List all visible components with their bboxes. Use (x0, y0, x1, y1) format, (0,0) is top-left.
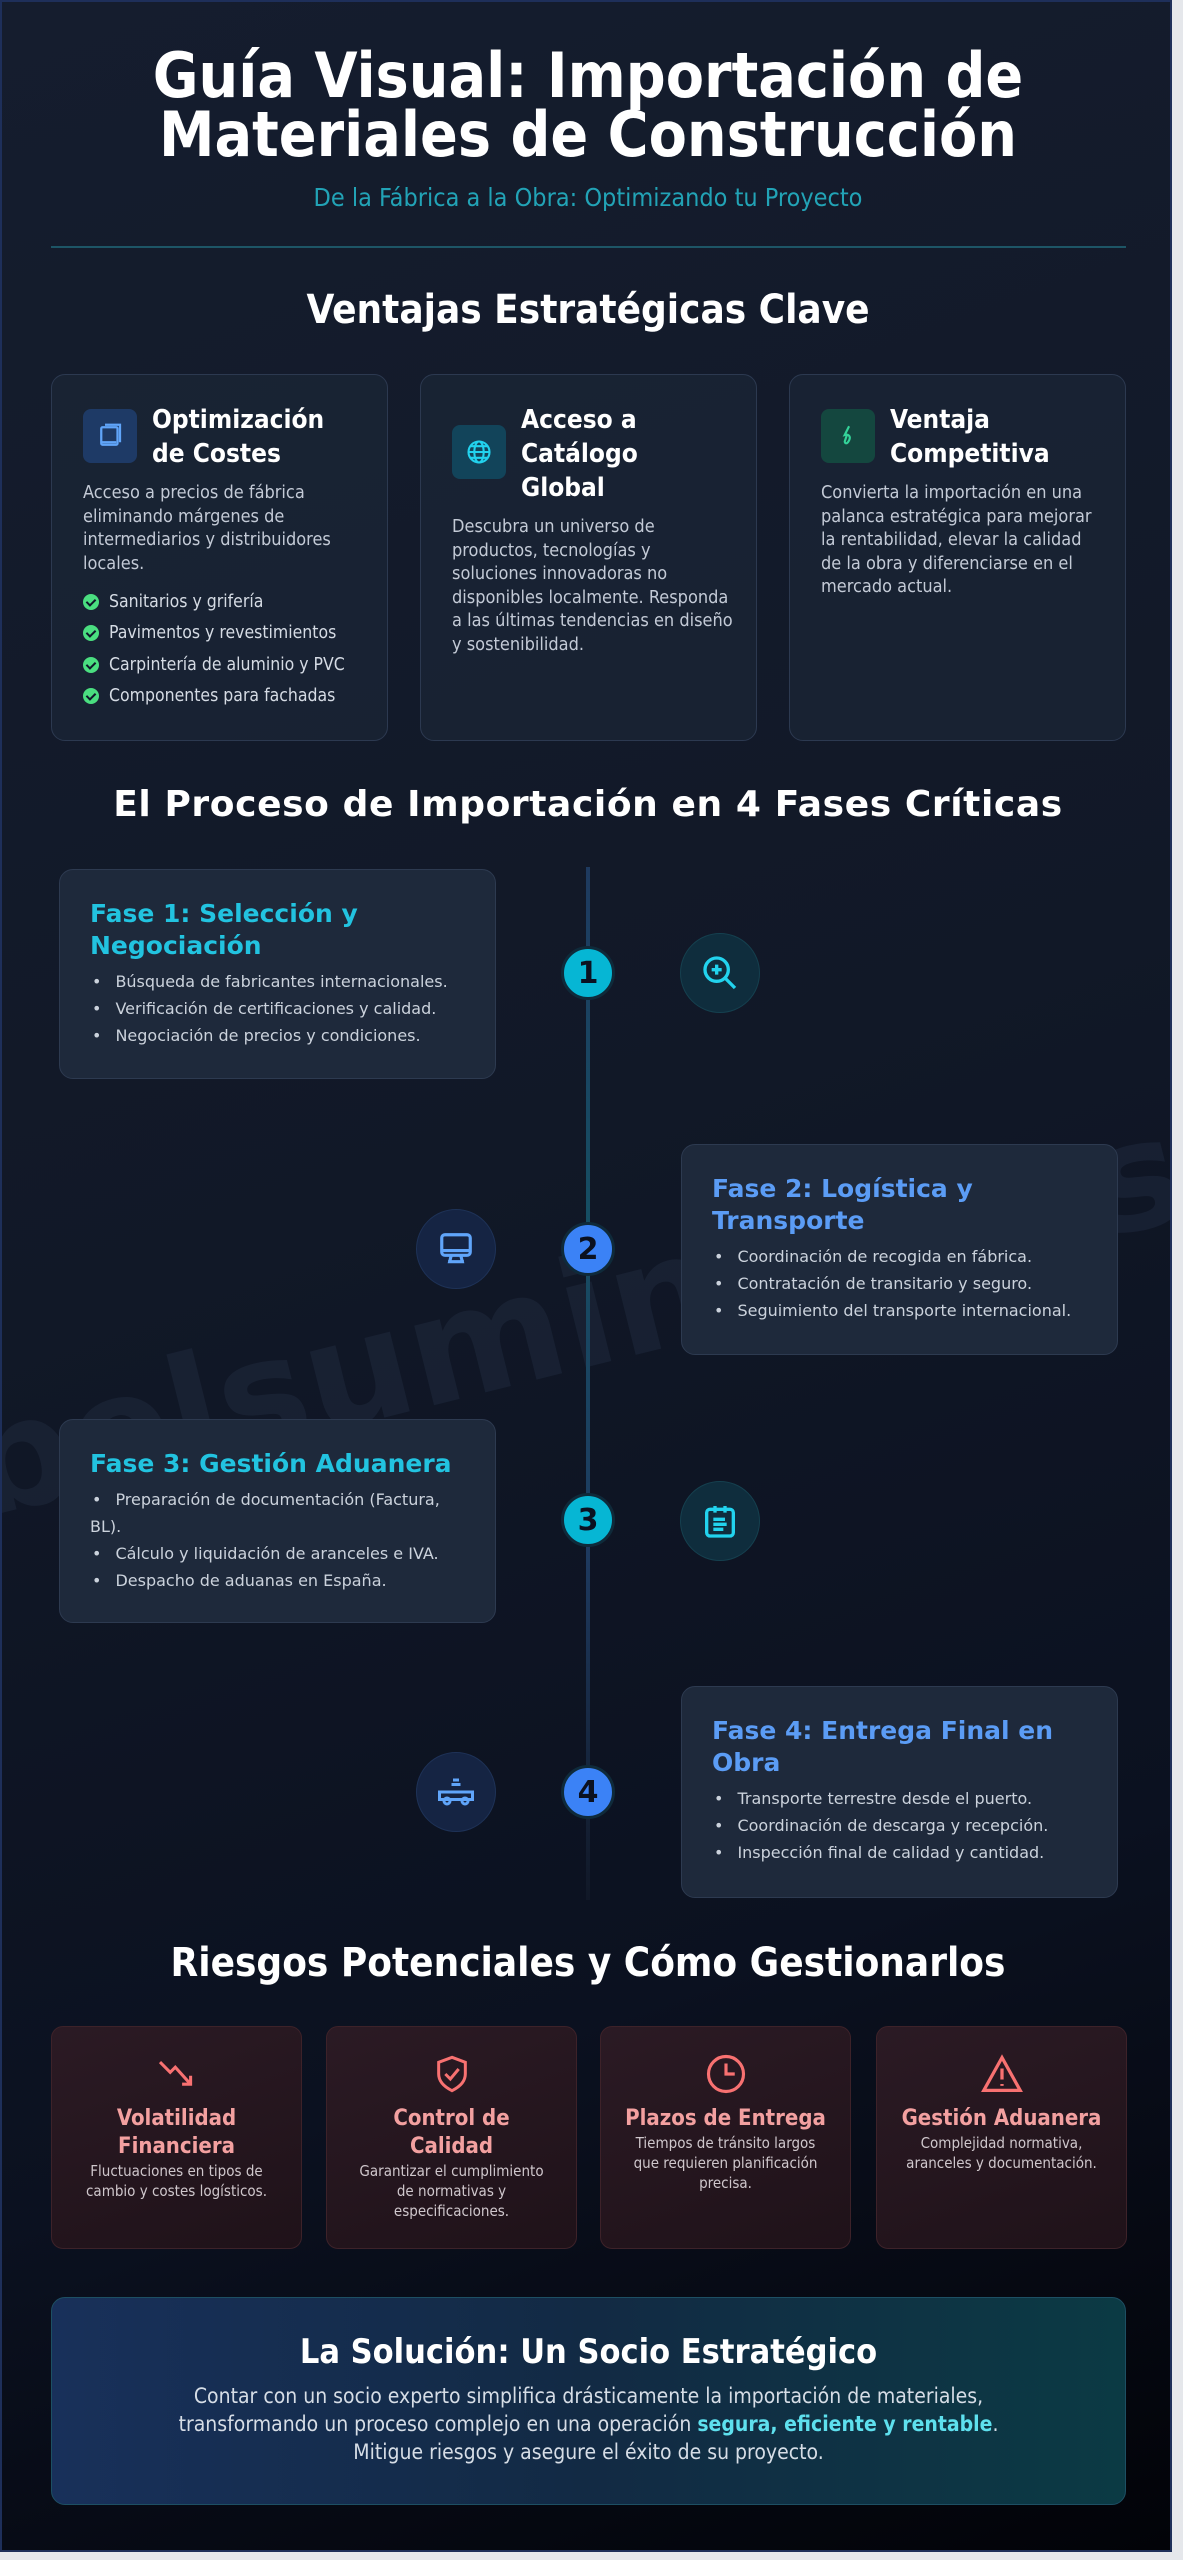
risk: aduanera: Gestión Aduanera (902, 2106, 1101, 2131)
risk: calidad: Control de (393, 2106, 510, 2131)
title: Materiales de Construcción (159, 98, 1017, 171)
solution title: La Solución: Un Socio Estratégico (300, 2332, 877, 2372)
phase 1: Negociación (90, 931, 262, 960)
icon: competitive (821, 409, 875, 463)
icon: clipboard (680, 1481, 760, 1561)
risk: volatilidad (51, 2026, 302, 2249)
phase 4: Transporte terrestre desde el puerto. (737, 1789, 1032, 1808)
phase 3: Preparación de documentación (Factura, BL). (90, 1490, 440, 1536)
card: ventaja competitiva: Competitiva (890, 439, 1050, 469)
phase 3 (59, 1419, 496, 1623)
phase 4: Obra (712, 1748, 780, 1777)
phase 1: Negociación de precios y condiciones. (115, 1026, 421, 1045)
card: optimización de costes: Acceso a precios de fábrica eliminando márgenes de intermediarios y distribuidores locales. (83, 482, 331, 574)
title: Guía Visual: Importación de (153, 39, 1023, 112)
phase 2: Coordinación de recogida en fábrica. (737, 1247, 1032, 1266)
card: ventaja competitiva: Convierta la importación en una palanca estratégica para mejorar la rentabilidad, elevar la calidad de la obra y diferenciarse en el mercado actual. (821, 482, 1092, 597)
heading: ventajas: Ventajas Estratégicas Clave (306, 287, 870, 333)
step 1: 1 (578, 956, 598, 990)
risk: volatilidad: Volatilidad (117, 2106, 236, 2131)
solution text (179, 2384, 998, 2464)
phase 1: Fase 1: Selección y (90, 899, 358, 928)
title (153, 39, 1023, 171)
card: optimización de costes (51, 374, 388, 741)
phase 3: Despacho de aduanas en España. (115, 1571, 387, 1590)
phase 3: Cálculo y liquidación de aranceles e IVA. (115, 1544, 439, 1563)
phase 1: Verificación de certificaciones y calidad. (115, 999, 436, 1018)
risk: aduanera: Complejidad normativa, aranceles y documentación. (906, 2134, 1097, 2172)
card: ventaja competitiva: Ventaja (890, 405, 990, 435)
icon: costs (83, 409, 137, 463)
risk: calidad (326, 2026, 577, 2249)
checklist: Pavimentos y revestimientos (109, 623, 336, 643)
solution box (51, 2297, 1126, 2505)
phase 4: Fase 4: Entrega Final en (712, 1716, 1053, 1745)
phase 2: Fase 2: Logística y (712, 1174, 973, 1203)
subtitle: De la Fábrica a la Obra: Optimizando tu Proyecto (314, 183, 862, 212)
timeline line (586, 867, 590, 1900)
icon: monitor (416, 1209, 496, 1289)
risk: aduanera (876, 2026, 1127, 2249)
card: catálogo global: Catálogo (521, 439, 638, 469)
card: optimización de costes: de Costes (152, 439, 281, 469)
card: ventaja competitiva (789, 374, 1126, 741)
step 2 (561, 1222, 615, 1276)
phase 4: Inspección final de calidad y cantidad. (737, 1843, 1044, 1862)
card: optimización de costes: Optimización (152, 405, 324, 435)
risk: plazos (600, 2026, 851, 2249)
checklist (83, 592, 345, 706)
solution text: Mitigue riesgos y asegure el éxito de su proyecto. (353, 2440, 824, 2464)
phase 1 (59, 869, 496, 1079)
checklist: Sanitarios y grifería (109, 592, 263, 612)
heading: proceso: El Proceso de Importación en 4 Fases Críticas (113, 784, 1063, 825)
step 3: 3 (578, 1502, 598, 1538)
checklist: Carpintería de aluminio y PVC (109, 655, 345, 675)
checklist: Componentes para fachadas (109, 686, 335, 706)
icon: globe (452, 425, 506, 479)
phase 4: Coordinación de descarga y recepción. (737, 1816, 1048, 1835)
risk: plazos: Plazos de Entrega (625, 2106, 826, 2131)
risk: calidad: Calidad (410, 2134, 493, 2159)
risk: calidad: Garantizar el cumplimiento de normativas y especificaciones. (359, 2162, 544, 2220)
phase 4 (681, 1686, 1118, 1898)
phase 2 (681, 1144, 1118, 1355)
card: catálogo global (420, 374, 757, 741)
phase 3: Fase 3: Gestión Aduanera (90, 1449, 452, 1478)
step 3 (561, 1493, 615, 1547)
step 4: 4 (578, 1774, 598, 1810)
step 2: 2 (578, 1232, 598, 1266)
heading: riesgos: Riesgos Potenciales y Cómo Gestionarlos (171, 1940, 1005, 1986)
card: catálogo global: Acceso a (521, 405, 637, 435)
phase 1: Búsqueda de fabricantes internacionales. (115, 972, 448, 991)
solution text: Contar con un socio experto simplifica drásticamente la importación de materiales, (194, 2384, 983, 2408)
card: catálogo global: Global (521, 473, 605, 503)
risk: volatilidad: Fluctuaciones en tipos de cambio y costes logísticos. (86, 2162, 267, 2200)
icon: truck (416, 1752, 496, 1832)
step 1 (561, 946, 615, 1000)
phase 2: Seguimiento del transporte internacional. (737, 1301, 1071, 1320)
card: catálogo global: Descubra un universo de productos, tecnologías y soluciones innovadoras no disponibles localmente. Responda a las últimas tendencias en diseño y sostenibilidad. (452, 516, 733, 654)
step 4 (561, 1765, 615, 1819)
solution text: transformando un proceso complejo en una operación segura, eficiente y rentable. (179, 2412, 998, 2436)
phase 2: Contratación de transitario y seguro. (737, 1274, 1032, 1293)
risk: volatilidad: Financiera (118, 2134, 235, 2159)
phase 2: Transporte (712, 1206, 864, 1235)
icon: search (680, 933, 760, 1013)
risk: plazos: Tiempos de tránsito largos que requieren planificación precisa. (634, 2134, 817, 2192)
